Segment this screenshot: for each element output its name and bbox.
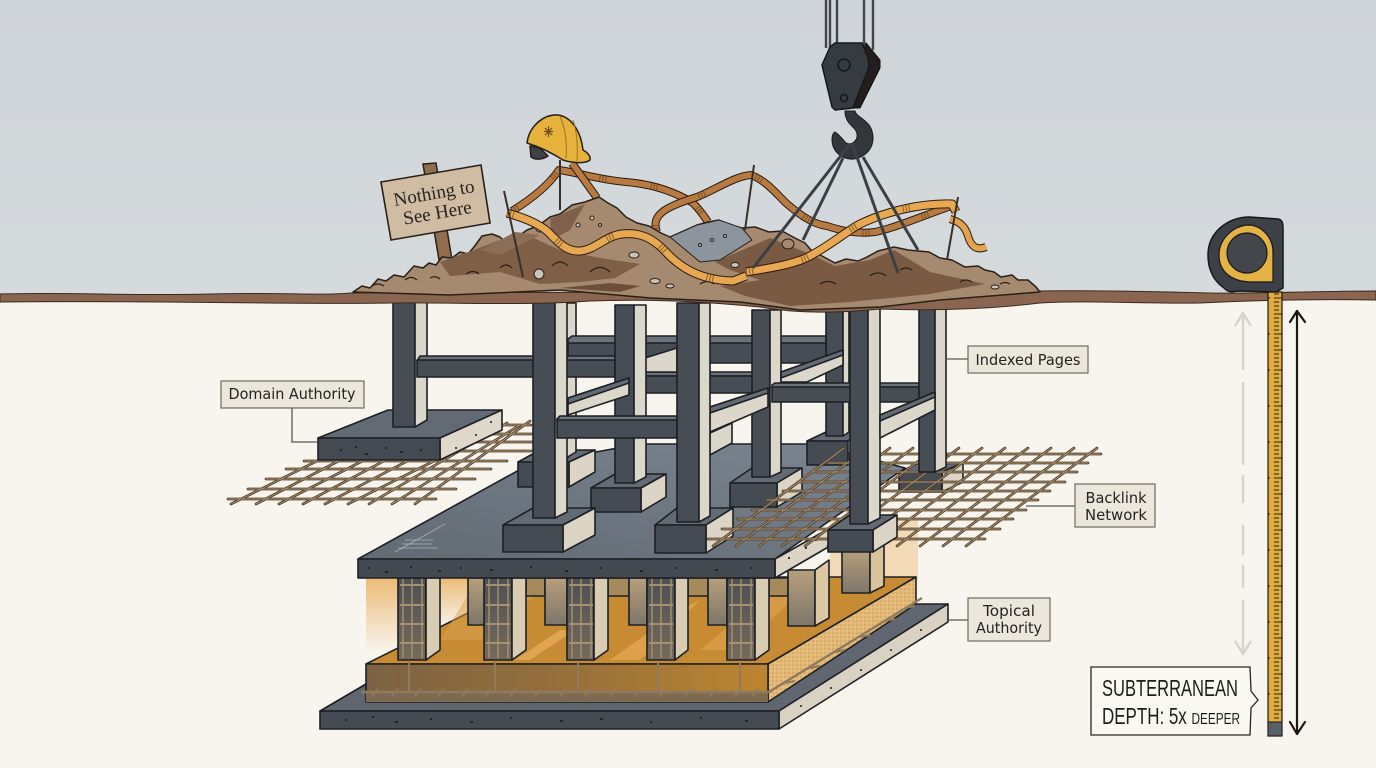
sign post	[423, 163, 454, 272]
column: domain authority footing	[318, 300, 502, 460]
sling cables	[753, 143, 918, 273]
front piles with rebar cages	[398, 578, 769, 660]
dirt mound silhouette	[353, 197, 1040, 310]
sky background	[0, 0, 1376, 296]
depth callout: DEPTH: 5x DEEPER	[1102, 703, 1240, 729]
rear support piles	[468, 545, 884, 626]
rubble pile	[353, 197, 1040, 310]
sign text: See Here	[402, 197, 473, 230]
middle columns with footings	[591, 305, 802, 512]
topical authority label: Authority	[976, 619, 1042, 637]
depth callout: SUBTERRANEAN	[1102, 675, 1238, 701]
diagonal beams	[568, 350, 843, 455]
front right diagonal beam	[880, 392, 935, 438]
beam behind front right column	[772, 383, 920, 402]
sign text: Nothing to	[392, 176, 476, 211]
crane hook and block	[753, 0, 918, 273]
dial	[1227, 233, 1267, 273]
backlink network label	[1026, 484, 1155, 527]
crane ropes	[826, 0, 873, 50]
tape blade with ticks	[1268, 292, 1282, 736]
orange glow behind foundation	[366, 520, 918, 653]
tape measure	[1208, 217, 1283, 736]
far right footing	[899, 463, 963, 492]
pulley block	[845, 43, 880, 108]
orange topical authority layer	[366, 577, 916, 702]
rear caution tape	[512, 163, 954, 233]
dark soil patches	[440, 235, 640, 284]
domain authority label	[221, 381, 364, 442]
left rebar mesh	[228, 421, 533, 504]
front footing and column one	[503, 296, 595, 552]
stakes	[504, 160, 958, 277]
front right footing and column	[828, 307, 897, 552]
horizontal tie rebar	[361, 598, 922, 696]
underground background	[0, 296, 1376, 768]
horizontal back beams	[417, 336, 826, 393]
far right column	[919, 300, 946, 472]
tape end hook	[1268, 722, 1282, 736]
gray gravel mound	[670, 220, 752, 262]
yellow ring	[1219, 225, 1273, 282]
indexed pages label: Indexed Pages	[976, 351, 1081, 369]
front caution tape	[507, 204, 986, 281]
backlink network label: Network	[1085, 506, 1147, 524]
indexed pages label	[946, 346, 1088, 373]
foundation structure	[228, 296, 1101, 729]
hard hat	[527, 115, 590, 163]
faint dashed depth arrow	[1235, 313, 1251, 654]
front footing and column two	[655, 303, 733, 553]
pebbles	[534, 216, 999, 289]
black depth arrow	[1290, 311, 1305, 734]
sign: Nothing to See Here	[381, 163, 490, 272]
sign board	[381, 165, 490, 240]
tape case	[1208, 217, 1283, 292]
backlink network label: Backlink	[1086, 489, 1147, 507]
mid-level beam	[557, 416, 677, 438]
upper concrete slab	[358, 444, 905, 578]
depth callout	[1091, 667, 1258, 735]
topical authority label	[948, 598, 1050, 641]
right rebar mesh	[708, 448, 1101, 546]
ground line	[0, 291, 1376, 312]
hook	[832, 111, 873, 159]
topical authority label: Topical	[982, 602, 1035, 620]
bottom concrete slab	[320, 604, 948, 729]
dirt clod marks	[372, 262, 1010, 286]
rear row columns	[518, 303, 860, 487]
domain authority label: Domain Authority	[228, 385, 356, 403]
